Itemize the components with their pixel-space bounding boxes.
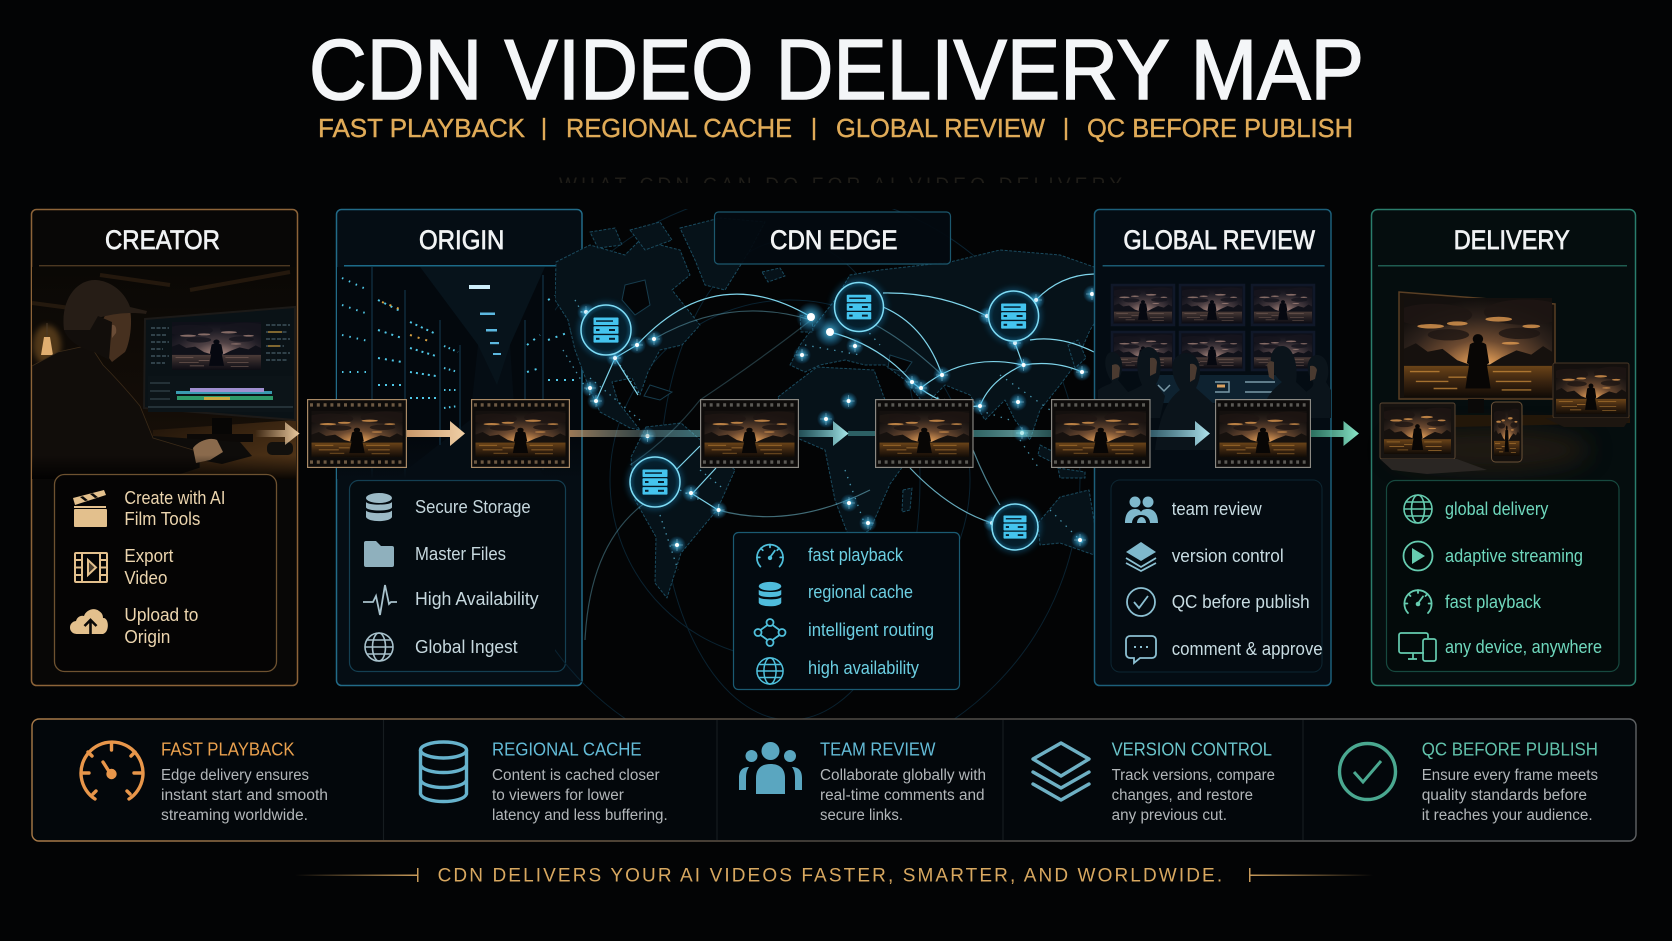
benefit text: quality standards before <box>1422 787 1587 804</box>
text: upload to origin <box>124 604 198 647</box>
server node: north america <box>578 302 634 358</box>
text: version control: version control <box>1172 545 1284 566</box>
subtitle: QC BEFORE PUBLISH <box>1087 113 1353 143</box>
text: QC before publish: QC before publish <box>1172 591 1310 612</box>
flow arrow: frame to origin <box>407 421 465 446</box>
device: second laptop <box>1545 363 1633 427</box>
film frame 3 <box>699 399 804 468</box>
benefit text: instant start and smooth <box>161 787 328 804</box>
text: any device, anywhere: any device, anywhere <box>1445 636 1602 657</box>
icon: team <box>1125 496 1158 523</box>
benefit: fast playback <box>81 738 328 824</box>
icon: check circle <box>1340 744 1396 800</box>
illustration: review room <box>1098 285 1331 450</box>
device: television <box>1395 292 1630 427</box>
benefit text <box>820 738 986 824</box>
benefit: version control <box>1033 738 1275 824</box>
flow arrow: review <box>1150 421 1210 446</box>
benefit text: Collaborate globally with <box>820 767 986 784</box>
video wall <box>1111 285 1318 370</box>
icon: database <box>420 742 466 802</box>
benefit text: real-time comments and <box>820 787 985 804</box>
text: intelligent routing: intelligent routing <box>808 619 934 640</box>
benefit text: TEAM REVIEW <box>820 738 936 760</box>
panel: global review <box>1094 210 1331 686</box>
text: high availability: High Availability <box>415 588 539 609</box>
text: fast playback: fast playback <box>1445 591 1542 612</box>
text: team review: team review <box>1172 498 1262 519</box>
icon: checkmark <box>1127 588 1155 616</box>
footer tagline: CDN DELIVERS YOUR AI VIDEOS FASTER, SMARTER, AND WORLDWIDE. <box>438 866 1222 886</box>
icon: cloud upload <box>70 609 108 634</box>
illustration: data center <box>337 267 581 479</box>
icon: gauge <box>1404 590 1432 613</box>
film frame 1 <box>306 399 412 468</box>
icon: play <box>1404 542 1432 570</box>
text: global ingest: Global Ingest <box>415 636 518 657</box>
benefit text <box>1112 738 1275 824</box>
benefit text: Ensure every frame meets <box>1422 767 1598 784</box>
list box: delivery <box>1386 480 1619 672</box>
heading: delivery: DELIVERY <box>1454 225 1570 255</box>
icon: devices <box>1399 633 1436 661</box>
flow band: edge to frame <box>848 431 875 436</box>
icon: layers <box>1126 542 1156 571</box>
text: export video: Video <box>124 567 167 588</box>
city lights <box>563 300 1085 570</box>
text: create with AI film tools: Create with AI <box>124 487 225 508</box>
subtitle: GLOBAL REVIEW <box>836 113 1045 143</box>
panel: origin <box>336 210 582 686</box>
continents <box>555 218 1110 598</box>
benefit: QC before publish <box>1340 738 1598 824</box>
text: master files: Master Files <box>415 543 506 564</box>
device: phone <box>1492 402 1522 462</box>
subtitle: REGIONAL CACHE <box>566 113 792 143</box>
icon: database <box>366 493 392 521</box>
flow arrow: delivery <box>1311 421 1359 446</box>
benefit text: Track versions, compare <box>1112 767 1275 784</box>
heading: creator: CREATOR <box>105 225 220 255</box>
list box: origin <box>350 480 566 672</box>
icon: routing <box>754 619 786 646</box>
list box: creator <box>54 474 276 672</box>
benefit text: FAST PLAYBACK <box>161 738 295 760</box>
heading: origin: ORIGIN <box>419 225 504 255</box>
benefit text: Edge delivery ensures <box>161 767 309 784</box>
benefit text: Content is cached closer <box>492 767 660 784</box>
text: secure storage: Secure Storage <box>415 496 531 517</box>
server node: oceania <box>989 501 1041 553</box>
benefit text: changes, and restore <box>1112 787 1253 804</box>
ghost caption: WHAT CDN CAN DO FOR AI VIDEO DELIVERY <box>559 175 1122 196</box>
film frame 4 <box>874 399 978 468</box>
benefit text: any previous cut. <box>1112 807 1227 824</box>
glow nodes <box>577 285 1101 554</box>
benefit: regional cache <box>420 738 668 824</box>
benefit text: to viewers for lower <box>492 787 624 804</box>
icon: speech bubble <box>1126 636 1156 663</box>
flow arrow: edge <box>799 421 849 446</box>
text: comment and approve: comment & approve <box>1172 638 1323 659</box>
benefit text: latency and less buffering. <box>492 807 668 824</box>
panel: creator <box>32 210 298 686</box>
text: create with AI film tools <box>124 487 225 529</box>
heading: global review: GLOBAL REVIEW <box>1123 225 1315 255</box>
text: high availability: high availability <box>808 657 920 678</box>
text: regional cache: regional cache <box>808 581 913 602</box>
benefit text: secure links. <box>820 807 903 824</box>
icon: folder <box>364 541 394 567</box>
icon: gauge <box>757 544 783 567</box>
heading box: CDN edge <box>714 212 950 264</box>
icon: clapperboard <box>73 490 107 527</box>
icon: team <box>739 742 802 794</box>
text: adaptive streaming: adaptive streaming <box>1445 545 1583 566</box>
list box: CDN edge <box>734 532 960 690</box>
flow band: origin to edge <box>570 430 700 437</box>
text: export video: Export <box>124 545 173 566</box>
benefit text: it reaches your audience. <box>1422 807 1593 824</box>
server node: south america <box>627 454 683 510</box>
icon: gauge <box>81 742 143 799</box>
benefit text <box>161 738 328 824</box>
benefits bar <box>32 719 1636 841</box>
icon: globe <box>1404 495 1432 523</box>
device: laptop <box>1380 403 1487 474</box>
subtitle: FAST PLAYBACK <box>318 113 526 143</box>
film frame 6 <box>1214 399 1315 468</box>
icon: database <box>759 582 781 606</box>
benefit text: REGIONAL CACHE <box>492 738 642 760</box>
text: fast playback: fast playback <box>808 544 904 565</box>
benefit text <box>492 738 668 824</box>
benefit text: QC BEFORE PUBLISH <box>1422 738 1598 760</box>
icon: globe <box>365 633 393 661</box>
icon: layers <box>1033 743 1089 800</box>
title: CDN VIDEO DELIVERY MAP <box>309 23 1364 118</box>
reviewers <box>1098 346 1331 450</box>
server node: asia <box>986 288 1042 344</box>
text: create with AI film tools: Film Tools <box>124 508 200 529</box>
heading box: CDN edge: CDN EDGE <box>770 225 898 255</box>
benefit text: streaming worldwide. <box>161 807 308 824</box>
arcs <box>585 274 1094 640</box>
list box: global review <box>1111 480 1323 672</box>
panel: delivery <box>1372 210 1636 686</box>
benefit: team review <box>739 738 986 824</box>
illustration: devices <box>1380 292 1633 474</box>
world map <box>555 209 1094 718</box>
text: upload to origin: Origin <box>124 626 170 647</box>
flow band: edge to review <box>973 430 1051 437</box>
flow arrow: creator to frame <box>255 422 300 445</box>
text: export video <box>124 545 173 588</box>
benefit text: VERSION CONTROL <box>1112 738 1272 760</box>
text: upload to origin: Upload to <box>124 604 198 625</box>
icon: globe <box>757 658 783 684</box>
subtitle <box>318 113 1353 143</box>
server node: europe <box>831 279 887 335</box>
text: global delivery: global delivery <box>1445 498 1549 519</box>
icon: pulse <box>363 585 397 615</box>
film frame 5 <box>1050 399 1155 468</box>
illustration: creator at workstation <box>32 267 296 480</box>
film frame 2 <box>470 399 575 468</box>
icon: film export <box>75 553 107 582</box>
benefit text <box>1422 738 1598 824</box>
